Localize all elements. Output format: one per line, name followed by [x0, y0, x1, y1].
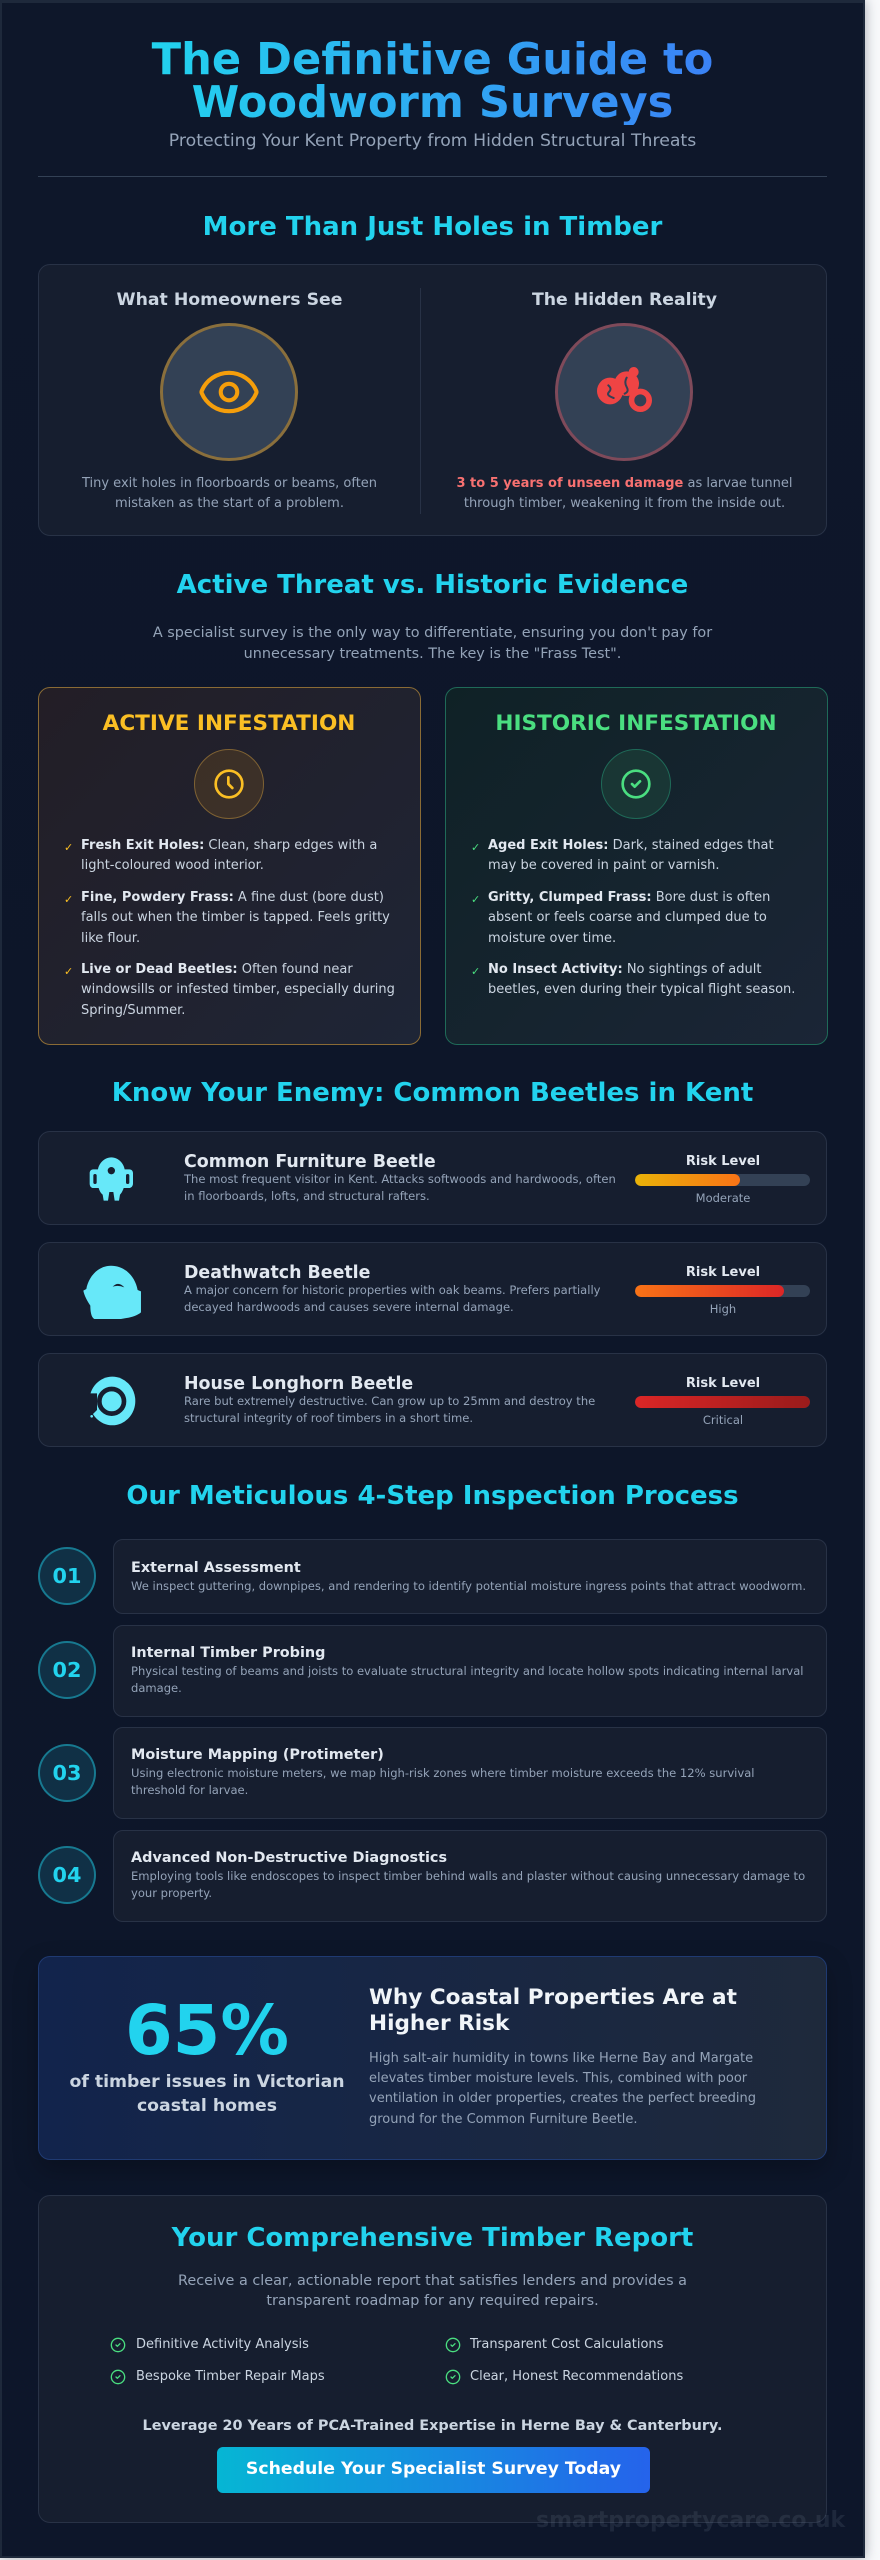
step card: Physical testing of beams and joists to evaluate structural integrity and locate hollow spots indicating internal larval — [131, 1664, 804, 1678]
report text: transparent roadmap for any required repairs. — [266, 2293, 599, 2309]
list item: No Insect Activity: No sightings of adult — [488, 962, 761, 977]
checklist — [471, 838, 795, 997]
panel: see vs reality — [38, 264, 827, 536]
feature: Bespoke Timber Repair Maps — [136, 2369, 325, 2384]
step card: threshold for larvae. — [131, 1783, 248, 1797]
step 3 — [38, 1727, 827, 1819]
list item: Fine, Powdery Frass: A fine dust (bore dust) — [81, 890, 384, 905]
checklist: ✓ — [64, 841, 73, 854]
step card: your property. — [131, 1886, 212, 1900]
intro text: unnecessary treatments. The key is the "Frass Test". — [244, 646, 621, 662]
risk meter: Risk Level — [686, 1154, 760, 1169]
heading: inspection process: Our Meticulous 4-Step Inspection Process — [126, 1481, 739, 1511]
icon: larvae damage — [555, 323, 693, 461]
beetle description: Rare but extremely destructive. Can grow up to 25mm and destroy the — [184, 1394, 595, 1408]
panel: historic infestation — [445, 687, 828, 1045]
report heading: Your Comprehensive Timber Report — [172, 2223, 693, 2253]
stat figure: 65% — [125, 1991, 289, 2071]
call to action button: Schedule Your Specialist Survey Today — [246, 2459, 621, 2479]
panel: common furniture beetle — [38, 1131, 827, 1225]
list item — [64, 962, 395, 1018]
risk meter: Risk Level — [686, 1376, 760, 1391]
title — [150, 38, 715, 124]
card heading: HISTORIC INFESTATION — [495, 711, 777, 736]
list item — [64, 838, 377, 873]
title: Woodworm Surveys — [192, 78, 673, 128]
step card: Employing tools like endoscopes to inspect timber behind walls and plaster without causing unnecessary damage to — [131, 1869, 805, 1883]
risk meter — [635, 1154, 810, 1205]
checklist — [64, 838, 395, 1018]
list item: absent or feels coarse and clumped due to — [488, 910, 767, 925]
beetle name: House Longhorn Beetle — [184, 1374, 413, 1394]
step card: External Assessment — [131, 1560, 301, 1576]
title: The Definitive Guide to — [152, 34, 713, 84]
beetle description — [184, 1283, 601, 1314]
list item: Aged Exit Holes: Dark, stained edges that — [488, 838, 774, 853]
beetle name: Deathwatch Beetle — [184, 1263, 370, 1283]
description: mistaken as the start of a problem. — [115, 496, 344, 511]
step number: 01 — [53, 1564, 81, 1588]
list item — [471, 838, 774, 873]
coastal heading — [369, 1985, 737, 2036]
feature: Definitive Activity Analysis — [136, 2337, 309, 2352]
icon: longhorn beetle — [90, 1376, 136, 1426]
description: through timber, weakening it from the inside out. — [464, 496, 785, 511]
list item: falls out when the timber is tapped. Feels gritty — [81, 910, 390, 925]
beetle name: Common Furniture Beetle — [184, 1152, 436, 1172]
step card — [113, 1539, 827, 1614]
icon: circle check — [601, 749, 671, 819]
list item: Fresh Exit Holes: Clean, sharp edges with a — [81, 838, 377, 853]
expertise line: Leverage 20 Years of PCA-Trained Expertise in Herne Bay & Canterbury. — [143, 2418, 722, 2434]
beetle description — [184, 1172, 616, 1203]
description — [456, 476, 792, 511]
stat caption — [69, 2072, 345, 2116]
panel: active infestation — [38, 687, 421, 1045]
column heading: The Hidden Reality — [532, 290, 717, 310]
column heading: What Homeowners See — [117, 290, 342, 310]
list item: Gritty, Clumped Frass: Bore dust is often — [488, 890, 770, 905]
checklist: ✓ — [471, 841, 480, 854]
list item: windowsills or infested timber, especially during — [81, 982, 395, 997]
step card — [113, 1625, 827, 1717]
list item: moisture over time. — [488, 931, 616, 946]
beetle description: decayed hardwoods and causes severe internal damage. — [184, 1300, 514, 1314]
step card: damage. — [131, 1681, 182, 1695]
step card: We inspect guttering, downpipes, and rendering to identify potential moisture ingress points that attract woodworm. — [131, 1579, 806, 1593]
column: what homeowners see — [82, 290, 377, 511]
coastal heading: Why Coastal Properties Are at — [369, 1985, 737, 2010]
feature list — [110, 2337, 683, 2384]
description: 3 to 5 years of unseen damage as larvae tunnel — [456, 476, 792, 491]
feature: Clear, Honest Recommendations — [470, 2369, 683, 2384]
list item: Spring/Summer. — [81, 1003, 185, 1018]
feature: Transparent Cost Calculations — [470, 2337, 663, 2352]
coastal text: ground for the Common Furniture Beetle. — [369, 2112, 638, 2127]
header — [152, 34, 713, 151]
panel: house longhorn beetle — [38, 1353, 827, 1447]
step number — [38, 1641, 96, 1699]
subtitle: Protecting Your Kent Property from Hidden Structural Threats — [169, 131, 696, 151]
list item: light-coloured wood interior. — [81, 858, 264, 873]
list item — [64, 890, 390, 946]
beetle description: The most frequent visitor in Kent. Attacks softwoods and hardwoods, often — [184, 1172, 616, 1186]
intro text — [153, 625, 712, 662]
risk meter: High — [710, 1302, 736, 1316]
list item: beetles, even during their typical flight season. — [488, 982, 795, 997]
card heading: ACTIVE INFESTATION — [103, 711, 355, 736]
step number — [38, 1846, 96, 1904]
stat caption: coastal homes — [137, 2096, 277, 2116]
description: Tiny exit holes in floorboards or beams, often — [82, 476, 377, 491]
beetle description: A major concern for historic properties with oak beams. Prefers partially — [184, 1283, 601, 1297]
heading: know your enemy: Know Your Enemy: Common Beetles in Kent — [112, 1078, 753, 1108]
coastal text: High salt-air humidity in towns like Herne Bay and Margate — [369, 2051, 753, 2066]
panel: deathwatch beetle — [38, 1242, 827, 1336]
step number: 02 — [53, 1658, 81, 1682]
coastal text: elevates timber moisture levels. This, combined with poor — [369, 2071, 747, 2086]
beetle description — [184, 1394, 595, 1425]
checklist: ✓ — [64, 893, 73, 906]
step card — [113, 1727, 827, 1819]
step card: Using electronic moisture meters, we map high-risk zones where timber moisture exceeds the 12% survival — [131, 1766, 754, 1780]
step 4 — [38, 1830, 827, 1922]
step card: Internal Timber Probing — [131, 1645, 325, 1661]
risk meter — [635, 1376, 810, 1427]
list item — [471, 962, 795, 997]
coastal text — [369, 2051, 756, 2127]
risk meter: Moderate — [696, 1191, 750, 1205]
heading: active vs historic: Active Threat vs. Historic Evidence — [177, 570, 688, 600]
panel: coastal risk stat — [38, 1956, 827, 2160]
step card: Moisture Mapping (Protimeter) — [131, 1747, 384, 1763]
icon: deathwatch beetle — [83, 1266, 141, 1319]
step number: 03 — [53, 1761, 81, 1785]
heading: more than just holes: More Than Just Holes in Timber — [203, 212, 662, 242]
list item: may be covered in paint or varnish. — [488, 858, 720, 873]
list item — [471, 890, 770, 946]
risk meter — [635, 1265, 810, 1316]
coastal text: ventilation in older properties, creates the perfect breeding — [369, 2091, 756, 2106]
step 2 — [38, 1625, 827, 1717]
beetle description: structural integrity of roof timbers in a short time. — [184, 1411, 473, 1425]
list item: like flour. — [81, 931, 140, 946]
icon: clock — [194, 749, 264, 819]
stat caption: of timber issues in Victorian — [69, 2072, 345, 2092]
description — [82, 476, 377, 511]
step card — [113, 1830, 827, 1922]
intro text: A specialist survey is the only way to differentiate, ensuring you don't pay for — [153, 625, 712, 641]
coastal heading: Higher Risk — [369, 2011, 509, 2036]
watermark: smartpropertycare.co.uk — [536, 2508, 845, 2533]
beetle description: in floorboards, lofts, and structural rafters. — [184, 1189, 430, 1203]
icon: eye — [160, 323, 298, 461]
column: the hidden reality — [456, 290, 792, 511]
icon: furniture beetle — [90, 1157, 133, 1201]
panel: timber report — [38, 2195, 827, 2523]
risk meter: Risk Level — [686, 1265, 760, 1280]
call to action button — [217, 2447, 650, 2493]
step 1 — [38, 1539, 827, 1614]
step number: 04 — [53, 1863, 81, 1887]
report text: Receive a clear, actionable report that satisfies lenders and provides a — [178, 2273, 687, 2289]
checklist: ✓ — [471, 893, 480, 906]
checklist: ✓ — [471, 965, 480, 978]
risk meter: Critical — [703, 1413, 743, 1427]
step number — [38, 1744, 96, 1802]
list item: Live or Dead Beetles: Often found near — [81, 962, 353, 977]
report text — [178, 2273, 687, 2309]
step card: Advanced Non-Destructive Diagnostics — [131, 1850, 447, 1866]
step number — [38, 1547, 96, 1605]
checklist: ✓ — [64, 965, 73, 978]
